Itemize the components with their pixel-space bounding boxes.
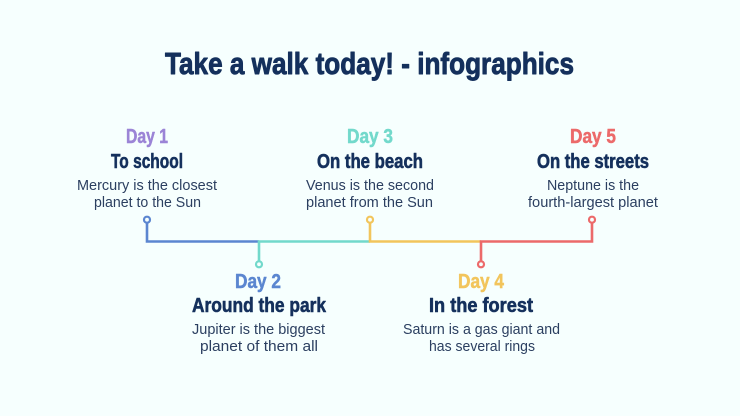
title: Take a walk today! - infographics [165,46,574,81]
description: has several rings [429,338,535,355]
day label: Day 3 [347,125,393,148]
node: day 3 [367,217,373,223]
day label: Day 4 [458,270,504,293]
panel: day 3 [306,125,434,211]
heading: On the beach [317,151,423,173]
day label: Day 1 [126,125,168,148]
description: fourth-largest planet [528,194,659,211]
description: Mercury is the closest [77,177,218,194]
description: Jupiter is the biggest [192,321,326,338]
timeline [144,217,595,267]
heading: Around the park [192,295,327,317]
segment: day 1 connector [147,223,259,242]
node: day 1 [144,217,150,223]
node: day 5 [589,217,595,223]
description: Neptune is the [547,177,639,194]
heading: To school [111,151,183,173]
node: day 4 [478,261,484,267]
day label: Day 5 [570,125,616,148]
day label: Day 2 [235,270,281,293]
description: planet to the Sun [94,194,201,211]
panel: day 4 [403,270,560,355]
segment: day 4 and 5 connector [481,223,592,261]
segment: day 3 connector [370,223,481,242]
heading: On the streets [537,151,649,173]
segment: day 2 connector [259,242,370,261]
panel: day 2 [192,270,327,355]
panel: day 5 [528,125,659,211]
description: Saturn is a gas giant and [403,321,560,338]
description: planet from the Sun [306,194,433,211]
heading: In the forest [429,295,533,317]
description: planet of them all [200,338,318,355]
node: day 2 [256,261,262,267]
panel: day 1 [77,125,218,211]
description: Venus is the second [306,177,434,194]
